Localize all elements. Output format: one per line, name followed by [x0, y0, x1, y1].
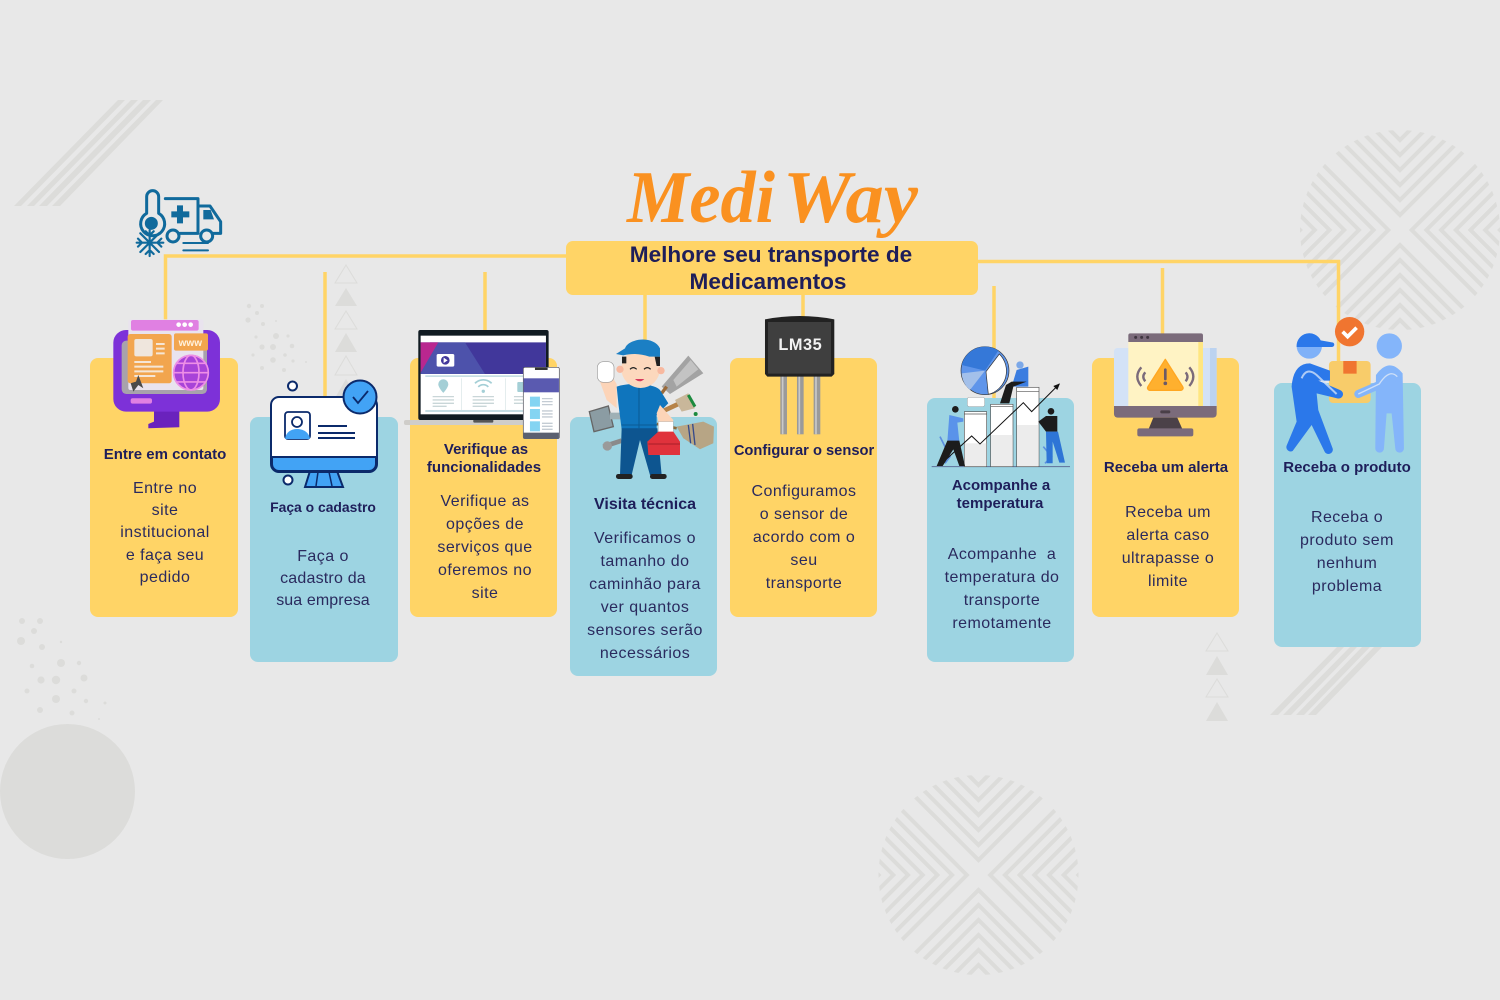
- panel: entre em contato: [90, 358, 238, 617]
- panel: faça o cadastro: sua empresa: [276, 592, 370, 609]
- panel: receba um alerta: alerta caso: [1126, 527, 1210, 544]
- illustration: team with charts: [932, 347, 1070, 467]
- panel: acompanhe a temperatura: temperatura do: [945, 569, 1059, 586]
- panel: receba um alerta: ultrapasse o: [1122, 550, 1214, 567]
- panel: visita técnica: [570, 417, 717, 676]
- panel: receba um alerta: limite: [1148, 573, 1188, 590]
- panel: visita técnica: necessários: [600, 645, 690, 662]
- panel: receba o produto: problema: [1312, 578, 1382, 595]
- panel: receba o produto: Receba o produto: [1283, 459, 1411, 476]
- decorative dots lower: [17, 618, 106, 720]
- panel: configurar o sensor: acordo com o: [753, 529, 855, 546]
- connector lines: [166, 256, 1338, 400]
- title: MediWay: Way: [783, 157, 919, 239]
- panel: verifique as funcionalidades: funcionalidades: [427, 459, 541, 476]
- title: MediWay: Medi: [626, 157, 775, 239]
- panel: faça o cadastro: cadastro da: [280, 570, 366, 587]
- panel: receba o produto: nenhum: [1317, 555, 1377, 572]
- panel: faça o cadastro: Faça o: [297, 548, 349, 565]
- decorative chevron circle top right: [1295, 126, 1500, 334]
- header banner: Medicamentos: [690, 269, 846, 294]
- panel: verifique as funcionalidades: Verifique as: [444, 441, 528, 458]
- icon: LM35 sensor: LM35: [778, 336, 822, 354]
- panel: verifique as funcionalidades: [410, 358, 557, 617]
- illustration: package handover: [1286, 317, 1404, 454]
- panel: verifique as funcionalidades: oferemos no: [438, 562, 532, 579]
- icon: LM35 sensor: [765, 316, 834, 434]
- decorative triangles right: [1206, 633, 1228, 721]
- decorative dots upper: [245, 304, 307, 372]
- panel: receba o produto: [1274, 383, 1421, 647]
- panel: verifique as funcionalidades: site: [472, 585, 498, 602]
- panel: configurar o sensor: seu: [790, 552, 818, 569]
- icon: registration monitor: [271, 380, 377, 487]
- icon: laptop and phone: [404, 330, 559, 439]
- panel: entre em contato: site: [152, 502, 178, 519]
- panel: visita técnica: caminhão para: [589, 576, 701, 593]
- panel: verifique as funcionalidades: Verifique as: [440, 493, 530, 510]
- panel: receba o produto: produto sem: [1300, 532, 1394, 549]
- panel: receba um alerta: [1092, 358, 1239, 617]
- panel: visita técnica: sensores serão: [587, 622, 703, 639]
- panel: entre em contato: pedido: [140, 569, 190, 586]
- illustration: technician with tools: [589, 340, 714, 479]
- decorative large grey circle: [0, 724, 135, 859]
- panel: acompanhe a temperatura: Acompanhe a: [952, 477, 1051, 494]
- panel: receba um alerta: Receba um alerta: [1104, 459, 1229, 476]
- panel: configurar o sensor: [730, 358, 877, 617]
- panel: visita técnica: Verificamos o: [594, 530, 696, 547]
- panel: entre em contato: Entre em contato: [104, 446, 226, 463]
- panel: verifique as funcionalidades: serviços que: [437, 539, 533, 556]
- panel: visita técnica: Visita técnica: [594, 496, 696, 513]
- header banner: Melhore seu transporte de: [630, 242, 912, 267]
- panel: faça o cadastro: [250, 417, 398, 662]
- panel: acompanhe a temperatura: temperatura: [957, 495, 1044, 512]
- panel: faça o cadastro: Faça o cadastro: [270, 499, 376, 515]
- logo: ambulance with thermometer: [137, 191, 221, 256]
- panel: acompanhe a temperatura: transporte: [964, 592, 1040, 609]
- panel: acompanhe a temperatura: [927, 398, 1074, 662]
- decorative triangles left: [335, 265, 357, 398]
- panel: receba o produto: Receba o: [1311, 509, 1383, 526]
- panel: configurar o sensor: o sensor de: [760, 506, 848, 523]
- panel: visita técnica: ver quantos: [601, 599, 689, 616]
- panel: configurar o sensor: Configurar o sensor: [734, 443, 874, 459]
- panel: entre em contato: institucional: [120, 524, 210, 541]
- panel: entre em contato: Entre no: [133, 480, 197, 497]
- decorative diagonal stripes top left: [14, 100, 163, 206]
- panel: acompanhe a temperatura: remotamente: [952, 615, 1052, 632]
- icon: website monitor: www: [178, 338, 202, 349]
- panel: acompanhe a temperatura: Acompanhe a: [948, 546, 1056, 563]
- icon: alert monitor: [1114, 333, 1217, 436]
- header banner: [566, 241, 978, 295]
- panel: configurar o sensor: Configuramos: [751, 483, 857, 500]
- decorative diagonal stripes bottom right: [1270, 647, 1382, 715]
- panel: receba um alerta: Receba um: [1125, 504, 1211, 521]
- panel: configurar o sensor: transporte: [766, 575, 842, 592]
- icon: website monitor: [113, 319, 220, 428]
- decorative chevron circle bottom: [874, 771, 1083, 979]
- panel: entre em contato: e faça seu: [126, 547, 204, 564]
- panel: visita técnica: tamanho do: [600, 553, 690, 570]
- panel: verifique as funcionalidades: opções de: [446, 516, 524, 533]
- title: MediWay: [626, 157, 919, 239]
